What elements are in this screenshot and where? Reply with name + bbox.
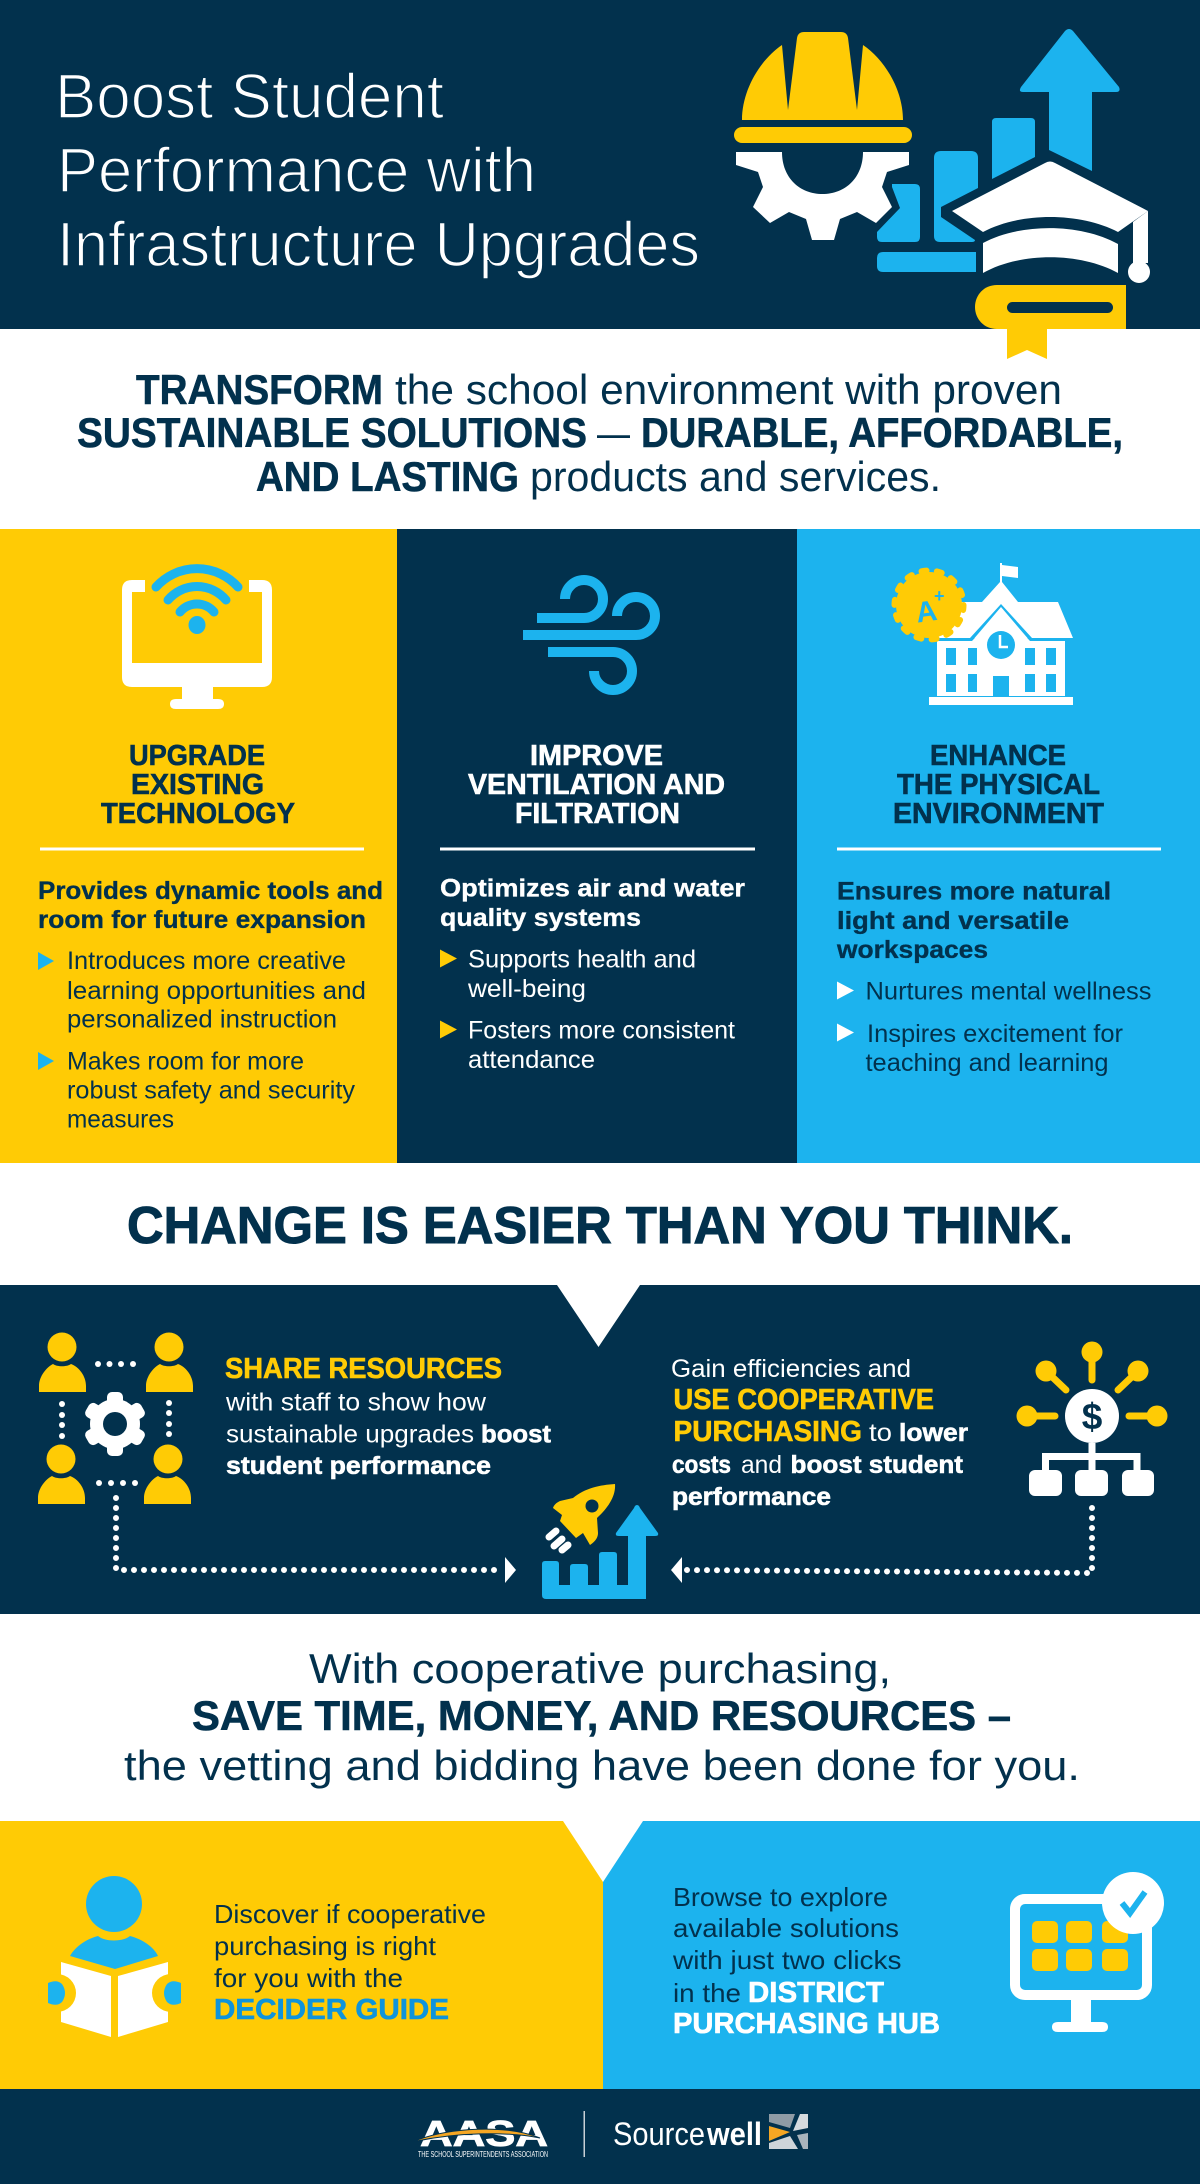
text: district purchasing hub: PURCHASING HUB [673, 2008, 940, 2040]
heading: VENTILATION AND [468, 769, 725, 801]
text: share resources: with staff to show how [225, 1388, 487, 1416]
statement: save time, money, and resources: SAVE TIME, MONEY, AND RESOURCES – [192, 1692, 1011, 1739]
statement: save time, money, and resources: With cooperative purchasing, [309, 1645, 891, 1692]
icon: monitor with wifi [122, 569, 272, 709]
text: share resources: SHARE RESOURCES [225, 1353, 502, 1385]
text: decider guide: Discover if cooperative [214, 1899, 486, 1929]
heading: IMPROVE [530, 740, 663, 772]
subheading: workspaces [836, 936, 988, 964]
text: decider guide: for you with the [214, 1963, 403, 1993]
bullet list: learning opportunities and [67, 977, 366, 1005]
bullet list [440, 946, 735, 1074]
text: share resources: boost [481, 1420, 552, 1448]
footer band [0, 2089, 1200, 2184]
subheading: Optimizes air and water [440, 874, 745, 902]
bullet list: well-being [467, 975, 586, 1003]
icon: dollar sign network: $ [1082, 1396, 1103, 1437]
icon: team sharing around a gear [38, 1332, 193, 1504]
logo: Sourcewell [613, 2114, 808, 2152]
bullet list: Supports health and [468, 946, 696, 974]
text: district purchasing hub: Browse to explore [673, 1882, 888, 1912]
arrow: dotted path from right [671, 1508, 1092, 1583]
panel: decider guide [0, 1821, 603, 2089]
subheading: quality systems [440, 904, 641, 932]
intro statement: TRANSFORM [136, 366, 383, 413]
icon: person reading a book [38, 1876, 190, 2037]
subheading: Ensures more natural [837, 878, 1111, 906]
intro statement [77, 366, 1123, 500]
icon: A+ badge: A [914, 595, 939, 630]
icon: A+ badge: + [934, 586, 945, 606]
heading: ENHANCE [930, 740, 1066, 772]
panel: enhance the physical environment [797, 529, 1200, 1163]
icon: A+ badge [894, 570, 964, 640]
icon: rising bar chart with arrow [877, 29, 1120, 272]
intro statement: — [597, 409, 630, 456]
subheading: light and versatile [837, 907, 1069, 935]
icon: book with bookmark [975, 285, 1126, 359]
heading: FILTRATION [515, 798, 680, 830]
logo: Sourcewell: well [706, 2116, 762, 2152]
bullet list: Fosters more consistent [468, 1016, 735, 1044]
text: use cooperative purchasing: performance [672, 1483, 831, 1511]
bullet list: Inspires excitement for [867, 1020, 1123, 1048]
intro statement: the school environment with proven [395, 366, 1062, 413]
heading [101, 740, 295, 830]
icon: monitor with app tiles and checkmark [1015, 1872, 1164, 2032]
icon: rocket and rising chart [542, 1484, 658, 1599]
header panel [0, 0, 1200, 359]
subheading: Provides dynamic tools and [38, 877, 383, 905]
panel: improve ventilation and filtration [397, 529, 797, 1163]
intro statement: AND LASTING [256, 453, 519, 500]
text: share resources: student performance [226, 1452, 491, 1480]
text: share resources: sustainable upgrades [226, 1420, 474, 1448]
text: use cooperative purchasing: to [869, 1419, 892, 1447]
icon: hard hat over gear [734, 32, 912, 240]
text: use cooperative purchasing: USE COOPERATIVE [674, 1384, 934, 1416]
heading: THE PHYSICAL [897, 769, 1100, 801]
logo: AASA: AASA [420, 2113, 548, 2154]
bullet list: teaching and learning [866, 1049, 1108, 1077]
text: use cooperative purchasing: PURCHASING [674, 1416, 862, 1448]
text: district purchasing hub: available solutions [673, 1913, 899, 1943]
bullet list: Introduces more creative [67, 947, 346, 975]
logo: AASA [417, 2113, 548, 2159]
bullet list: attendance [468, 1046, 595, 1074]
intro statement: SUSTAINABLE SOLUTIONS [77, 409, 587, 456]
heading [468, 740, 725, 830]
heading: ENVIRONMENT [893, 798, 1104, 830]
intro statement: DURABLE, AFFORDABLE, [641, 409, 1123, 456]
heading: TECHNOLOGY [101, 798, 295, 830]
title: Infrastructure Upgrades [57, 210, 700, 280]
text: use cooperative purchasing: lower [899, 1419, 968, 1447]
panel: upgrade existing technology [0, 529, 397, 1163]
icon: school building [929, 563, 1073, 705]
title: Performance with [57, 136, 536, 206]
icon: wind [523, 580, 655, 690]
statement: save time, money, and resources: the vetting and bidding have been done for you. [124, 1742, 1080, 1789]
subheading [38, 877, 383, 934]
text: decider guide: purchasing is right [214, 1931, 437, 1961]
text: use cooperative purchasing: costs [672, 1451, 731, 1479]
subheading: room for future expansion [38, 906, 366, 934]
bullet list: robust safety and security [67, 1076, 355, 1104]
logo: AASA: THE SCHOOL SUPERINTENDENTS ASSOCIATION [418, 2150, 548, 2159]
heading: UPGRADE [129, 740, 265, 772]
text: share resources [225, 1353, 552, 1480]
panel: district purchasing hub [603, 1821, 1200, 2089]
text: decider guide [214, 1899, 486, 2026]
bullet list [837, 978, 1152, 1077]
heading: change is easier: CHANGE IS EASIER THAN YOU THINK. [127, 1197, 1073, 1255]
logo: Sourcewell: Source [613, 2116, 705, 2152]
arrow: dotted path from left [116, 1498, 516, 1583]
text: district purchasing hub: with just two clicks [672, 1945, 902, 1975]
intro statement: products and services. [530, 453, 941, 500]
text: use cooperative purchasing [671, 1355, 968, 1511]
text: use cooperative purchasing: and [741, 1451, 782, 1479]
subheading [440, 874, 745, 932]
text: use cooperative purchasing: boost student [790, 1451, 964, 1479]
bullet list [38, 947, 366, 1134]
bullet list: measures [67, 1106, 174, 1134]
heading [893, 740, 1104, 830]
subheading [836, 878, 1111, 964]
statement: save time, money, and resources [124, 1645, 1080, 1789]
panel: process band [0, 1285, 1200, 1614]
text: district purchasing hub: in the [673, 1978, 741, 2008]
icon: graduation cap [952, 162, 1150, 283]
bullet list: Makes room for more [67, 1048, 304, 1076]
icon: dollar sign network [1016, 1342, 1168, 1496]
text: district purchasing hub [672, 1882, 940, 2040]
text: decider guide: DECIDER GUIDE [214, 1994, 449, 2026]
heading: EXISTING [131, 769, 264, 801]
bullet list: Nurtures mental wellness [866, 978, 1152, 1006]
text: district purchasing hub: DISTRICT [748, 1977, 884, 2009]
title: Boost Student [55, 62, 444, 132]
title [55, 62, 700, 280]
bullet list: personalized instruction [67, 1006, 337, 1034]
text: use cooperative purchasing: Gain efficiencies and [671, 1355, 911, 1383]
